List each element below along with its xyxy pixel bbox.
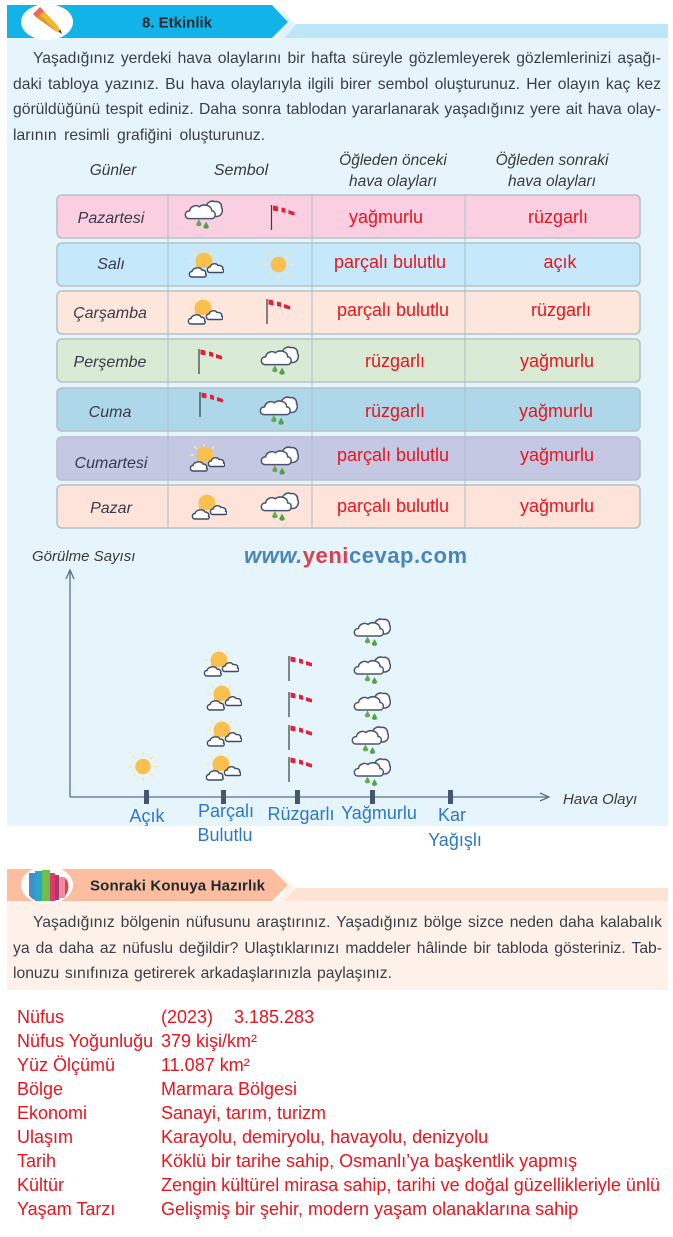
list: province facts: Kültür xyxy=(17,1175,64,1195)
list: province facts: 3.185.283 xyxy=(234,1007,314,1027)
row: Cuma xyxy=(57,388,640,431)
table header: Öğleden sonraki xyxy=(496,151,609,169)
row: Pazar xyxy=(57,485,640,528)
text block: preparation instructions xyxy=(13,914,662,982)
panel: activity background xyxy=(7,38,668,826)
icon: books xyxy=(21,866,73,904)
list: province facts: 379 kişi/km² xyxy=(161,1031,257,1051)
text block: activity instructions: görüldüğünü tespit ediniz. Daha sonra tablodan yararlanarak yaşadığınız yere ait hava olay- xyxy=(13,101,661,118)
table header: Öğleden önceki xyxy=(339,151,447,169)
row: Pazartesi: yağmurlu xyxy=(349,207,423,227)
list: province facts: Nüfus Yoğunluğu xyxy=(17,1031,153,1051)
x axis category labels: Yağmurlu xyxy=(341,803,417,823)
x axis label: Hava Olayı xyxy=(563,791,637,808)
row: Pazartesi xyxy=(57,195,640,238)
table header xyxy=(90,151,609,190)
heading: 8. Etkinlik: 8. Etkinlik xyxy=(142,14,213,32)
list: province facts: Yüz Ölçümü xyxy=(17,1055,115,1075)
list: province facts: 11.087 km² xyxy=(161,1055,250,1075)
row: Salı: Salı xyxy=(97,256,125,273)
list: province facts: Ulaşım xyxy=(17,1127,73,1147)
panel: preparation background xyxy=(7,901,668,990)
table: weekly weather observations xyxy=(57,194,640,528)
row: Perşembe: rüzgarlı xyxy=(365,351,425,371)
list: province facts: Bölge xyxy=(17,1079,63,1099)
list: province facts: Köklü bir tarihe sahip, Osmanlı’ya başkentlik yapmış xyxy=(161,1151,577,1171)
x axis category labels: Bulutlu xyxy=(197,825,253,845)
row: Pazartesi: rüzgarlı xyxy=(528,207,588,227)
icons: Yağmurlu xyxy=(352,619,390,786)
axes xyxy=(66,570,549,801)
text block: activity instructions: Yaşadığınız yerdeki hava olaylarını bir hafta süreyle gözlemleyerek gözlemlerinizi aşağı- xyxy=(33,50,661,67)
row: Salı xyxy=(57,243,640,286)
list: province facts: Gelişmiş bir şehir, modern yaşam olanaklarına sahip xyxy=(161,1199,578,1219)
watermark: www.yenicevap.com xyxy=(244,543,467,568)
list: province facts: (2023) xyxy=(161,1007,213,1027)
table header: Sembol xyxy=(214,162,269,179)
row: Pazar: Pazar xyxy=(90,500,133,517)
row: Perşembe xyxy=(57,339,640,382)
row: Cumartesi xyxy=(57,437,640,480)
list: province facts: Marmara Bölgesi xyxy=(161,1079,297,1099)
list: province facts xyxy=(17,1007,660,1219)
row: Salı: parçalı bulutlu xyxy=(334,252,446,272)
y axis label: Görülme Sayısı xyxy=(32,548,135,565)
list: province facts: Ekonomi xyxy=(17,1103,87,1123)
table header: Günler xyxy=(90,162,137,179)
row: Çarşamba: parçalı bulutlu xyxy=(337,300,449,320)
row: Pazar: yağmurlu xyxy=(520,496,594,516)
row: Çarşamba xyxy=(57,291,640,334)
text block: activity instructions xyxy=(13,50,661,144)
list: province facts: Sanayi, tarım, turizm xyxy=(161,1103,326,1123)
table header: hava olayları xyxy=(508,173,596,190)
banner: Sonraki Konuya Hazırlık xyxy=(7,866,668,904)
axis ticks xyxy=(144,790,453,804)
banner: 8. Etkinlik xyxy=(7,4,668,40)
icon: pencil xyxy=(21,4,73,40)
row: Salı: açık xyxy=(543,252,578,272)
x axis category labels: Açık xyxy=(129,806,165,826)
row: Pazartesi: Pazartesi xyxy=(78,210,145,227)
text block: preparation instructions: ya da daha az nüfuslu değildir? Ulaştıklarınızı maddeler hâlinde bir tabloda gösteriniz. Tab- xyxy=(13,940,662,957)
x axis category labels: Yağışlı xyxy=(428,830,482,850)
pictograph chart xyxy=(32,543,637,850)
x axis category labels xyxy=(129,801,482,850)
x axis category labels: Parçalı xyxy=(198,801,254,821)
x axis category labels: Kar xyxy=(438,805,466,825)
icons: Rüzgarlı xyxy=(289,656,312,782)
x axis category labels: Rüzgarlı xyxy=(267,804,335,824)
row: Çarşamba: rüzgarlı xyxy=(531,300,591,320)
row: Cuma: rüzgarlı xyxy=(365,401,425,421)
row: Cumartesi: Cumartesi xyxy=(75,455,148,472)
list: province facts: Tarih xyxy=(17,1151,56,1171)
icons: Parçalı Bulutlu xyxy=(204,649,242,780)
table header: hava olayları xyxy=(349,173,437,190)
list: province facts: Yaşam Tarzı xyxy=(17,1199,115,1219)
row: Pazar: parçalı bulutlu xyxy=(337,496,449,516)
text block: preparation instructions: Yaşadığınız bölgenin nüfusunu araştırınız. Yaşadığınız bölge sizce neden daha kalabalık xyxy=(33,914,662,931)
row: Çarşamba: Çarşamba xyxy=(73,305,147,322)
icons: Açık xyxy=(128,752,158,781)
row: Perşembe: Perşembe xyxy=(74,354,147,371)
row: Cuma: Cuma xyxy=(89,404,131,421)
row: Cumartesi: parçalı bulutlu xyxy=(337,445,449,465)
text block: preparation instructions: lonuzu sınıfınıza getirerek arkadaşlarınızla paylaşınız. xyxy=(13,965,392,982)
row: Cumartesi: yağmurlu xyxy=(520,445,594,465)
list: province facts: Zengin kültürel mirasa sahip, tarihi ve doğal güzellikleriyle ünlü xyxy=(161,1175,660,1195)
text block: activity instructions: larının resimli grafiğini oluşturunuz. xyxy=(13,127,265,144)
row: Cuma: yağmurlu xyxy=(519,401,593,421)
list: province facts: Karayolu, demiryolu, havayolu, denizyolu xyxy=(161,1127,488,1147)
heading: Sonraki Konuya Hazırlık: Sonraki Konuya Hazırlık xyxy=(90,878,266,894)
row: Perşembe: yağmurlu xyxy=(520,351,594,371)
list: province facts: Nüfus xyxy=(17,1007,64,1027)
text block: activity instructions: daki tabloya yazınız. Bu hava olaylarıyla ilgili birer sembol oluşturunuz. Her olayın kaç kez xyxy=(13,76,661,93)
